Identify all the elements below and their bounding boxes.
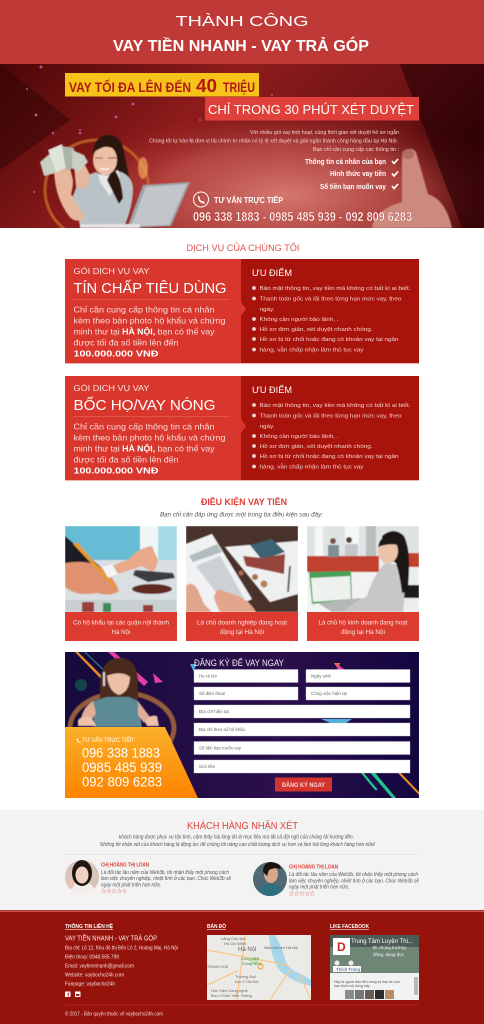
hotline label: TƯ VẤN TRỰC TIẾP — [214, 195, 284, 205]
avatar: woman — [65, 860, 99, 894]
map: Trường Đại — [235, 974, 256, 979]
caption text: Hà Nội — [112, 630, 130, 636]
testimonial: first customer: Là đối tác lâu năm của Web3b, tôi nhận thấy một phong cách — [101, 869, 229, 876]
facebook widget — [330, 935, 419, 1000]
map: Hồ Chí Minh — [224, 941, 246, 946]
conditions subtitle: Bạn chỉ cần đáp ứng được một trong ba điều kiện sau đây: — [160, 512, 323, 518]
ring glow — [45, 140, 149, 240]
hero banner — [0, 64, 484, 228]
testimonials intro — [100, 834, 376, 848]
testimonial: first customer: ☆☆☆☆☆ — [101, 887, 127, 895]
card benefits: ngày. — [260, 307, 275, 313]
facebook widget: Thích Trang — [336, 967, 361, 972]
card benefits: Hồ sơ đơn giản, xét duyệt nhanh chóng. — [260, 444, 373, 450]
offer badge: 40 million: TRIỆU — [223, 78, 255, 95]
map: Bưu Chính Viễn Thông — [211, 993, 252, 998]
hotline numbers: 0985 485 939 — [82, 760, 162, 775]
caption text: động tại Hà Nội — [341, 630, 385, 636]
hero checklist — [305, 159, 398, 191]
photo: signing paperwork — [65, 526, 177, 612]
banknotes — [40, 150, 60, 176]
testimonial: second customer: CHỊ HOÀNG THỊ LOAN — [289, 863, 338, 870]
form fields — [194, 670, 410, 773]
hero checklist: Thông tin cá nhân của bạn — [305, 159, 386, 166]
footer column: contact: VAY TIỀN NHANH - VAY TRẢ GÓP — [65, 932, 157, 942]
panel: registration form — [65, 652, 419, 798]
card benefits: Không cần người bảo lãnh, . — [260, 317, 339, 323]
hotline numbers: 096 338 1883 — [82, 746, 160, 760]
hotline label: TƯ VẤN TRỰC TIẾP: — [82, 737, 135, 744]
card left text: GÓI DỊCH VỤ VAY — [74, 266, 150, 276]
card left text: được tối đa số tiền lên đến — [74, 454, 179, 464]
offer badge: 30 minutes — [205, 97, 419, 120]
testimonial: first customer: ngày một phát triển hơn nữa. — [101, 882, 161, 888]
caption bar — [307, 612, 419, 641]
testimonial: first customer: CHỊ HOÀNG THỊ LOAN — [101, 862, 149, 868]
card benefits — [252, 267, 411, 354]
footer column: contact: Email: vaytiennhanh@gmail.com — [65, 964, 134, 970]
card left text — [73, 383, 230, 476]
footer column: contact: Website: vaybocho24h.com — [65, 972, 124, 978]
caption text: Là chủ doanh nghiệp đang hoạt — [197, 620, 287, 626]
phone glyph — [76, 738, 81, 743]
hero intro text — [149, 129, 399, 153]
avatar: man — [253, 862, 287, 896]
header headline: VAY TIỀN NHANH - VAY TRẢ GÓP — [113, 37, 369, 55]
caption text: động tại Hà Nội — [220, 630, 264, 636]
card benefits: ngày. — [260, 424, 275, 430]
woman with cash — [40, 135, 133, 225]
pointing hand — [372, 149, 452, 228]
card left text: 100.000.000 VNĐ — [74, 348, 159, 358]
card left text: kèm theo bản photo hộ khẩu và chứng — [74, 316, 226, 326]
ring glow — [67, 692, 177, 743]
form title: ĐĂNG KÝ ĐỂ VAY NGAY — [194, 657, 284, 668]
facebook widget: D — [337, 940, 346, 954]
card left text — [73, 266, 230, 358]
card benefits: Bảo mật thông tin, vay tiền mà không có bất kì ai biết. — [260, 286, 411, 292]
form fields: Địa chỉ hiện tại — [199, 708, 229, 714]
map: học Y Hà Nội — [235, 979, 259, 984]
card benefits: Hồ sơ bị từ chối hoặc đang có khoản vay tại ngân — [260, 454, 398, 460]
card left text: được tối đa số tiền lên đến — [74, 338, 179, 348]
card left text: minh thư tại HÀ NỘI, bạn có thể vay — [74, 442, 215, 454]
submit button: ĐĂNG KÝ NGAY — [282, 782, 325, 789]
map: Thống Nhất — [241, 961, 263, 966]
service card: unsecured loan — [65, 259, 419, 364]
arms and hands — [54, 166, 85, 221]
facebook widget: bạn thích nội dung này — [334, 984, 370, 988]
map: Lăng Chủ tịch — [221, 936, 246, 941]
submit button — [275, 778, 332, 792]
hero checklist: Số tiền bạn muốn vay — [320, 182, 386, 191]
testimonial: second customer: ngày một phát triển hơn nữa. — [289, 884, 349, 890]
card left text: Chỉ cần cung cấp thông tin cá nhân — [74, 422, 215, 432]
offer badge: 40 million: 40 — [196, 75, 217, 96]
form fields: Giới tiền — [199, 764, 215, 769]
card benefits: ƯU ĐIỂM — [252, 384, 292, 396]
card benefits: Thanh toán gốc và lãi theo từng hạn mức vay, theo — [260, 414, 402, 420]
orange hotline panel — [65, 727, 198, 798]
caption bar — [186, 612, 298, 641]
card benefits: Bảo mật thông tin, vay tiền mà không có bất kì ai biết. — [260, 403, 411, 409]
map: Nhà hát lớn Hà Nội — [264, 945, 298, 950]
shirt — [72, 169, 133, 225]
hotline numbers: 092 809 6283 — [82, 774, 162, 790]
hero checklist: Hình thức vay tiền — [330, 169, 386, 178]
map: Hà Nội — [238, 947, 256, 953]
footer column: contact: Fanpage: vaybocho24h — [65, 982, 115, 988]
caption text: Có hộ khẩu tại các quận nội thành — [73, 620, 169, 626]
caption text: Là chủ hộ kinh doanh đang hoạt — [318, 620, 408, 626]
card left text: kèm theo bản photo hộ khẩu và chứng — [74, 432, 226, 442]
panel: testimonials — [0, 810, 484, 910]
card left text: minh thư tại HÀ NỘI, bạn có thể vay — [74, 326, 215, 336]
hotline numbers — [82, 748, 162, 786]
facebook widget: Hãy là người đầu tiên trong số bạn bè của — [334, 980, 400, 984]
caption text — [73, 620, 169, 636]
facebook widget: Đi chúng trường — [373, 945, 406, 950]
form fields: Họ và tên — [199, 674, 217, 678]
footer column: contact: Địa chỉ: Lô 12, Khu đô thị Bến Lô 2, Hoàng Mai, Hà Nội — [65, 944, 178, 952]
social icons — [65, 992, 80, 997]
copyright: © 2017 - Bản quyền thuộc về vaybocho24h.com — [65, 1010, 163, 1018]
footer column: contact: Điện thoại: 0948.565.799 — [65, 954, 119, 960]
testimonial: second customer: làm việc chuyên nghiệp, nhiệt tình ở các bạn. Chúc Web3b sẽ — [289, 877, 419, 884]
card left text: TÍN CHẤP TIÊU DÙNG — [74, 280, 226, 297]
laptop — [80, 182, 190, 228]
card left text: GÓI DỊCH VỤ VAY — [74, 383, 150, 393]
caption text — [197, 620, 287, 636]
hair behind — [92, 134, 130, 178]
offer badge: 30 minutes: CHỈ TRONG 30 PHÚT XÉT DUYỆT — [208, 102, 414, 117]
card benefits: hàng, vẫn chấp nhận làm thủ tục vay — [260, 464, 364, 470]
photo: businesswoman with laptop — [307, 526, 419, 612]
testimonials intro: khách hàng được phục vụ tận tình, cảm thấy hài lòng đó là mục tiêu mà tất cả đội ngũ của chúng tôi hướng đến. — [119, 834, 354, 840]
form fields: Số điện thoại — [199, 691, 225, 696]
form fields: Ngày sinh — [311, 674, 331, 678]
condition card: business owner — [186, 526, 298, 641]
hero intro text: Chúng tôi tự hào là đơn vị tài chính tư nhân có tỷ lệ xét duyệt và giải ngân thành công hàng đầu tại Hà Nội. — [149, 138, 398, 144]
testimonial: first customer — [65, 860, 231, 895]
card benefits: Không cần người bảo lãnh, . — [260, 434, 339, 440]
caption bar — [65, 612, 177, 641]
testimonial: first customer: làm việc chuyên nghiệp, nhiệt tình ở các bạn. Chúc Web3b sẽ — [101, 875, 231, 882]
map: TRUNG HOÀ — [207, 965, 229, 969]
sparkles — [26, 66, 273, 193]
card left text: BỐC HỌ/VAY NÓNG — [74, 396, 215, 414]
offer badge: 40 million — [65, 73, 259, 96]
testimonial: second customer: Là đối tác lâu năm của Web3b, tôi nhận thấy một phong cách — [289, 871, 418, 878]
card benefits: Hồ sơ đơn giản, xét duyệt nhanh chóng. — [260, 327, 373, 333]
condition card: household registration — [65, 526, 177, 641]
testimonial: second customer: ☆☆☆☆☆ — [289, 889, 315, 897]
facebook widget: Trung Tâm Luyện Thi... — [351, 939, 413, 945]
footer column: facebook heading: LIKE FACEBOOK — [330, 924, 369, 930]
hero intro text: Với nhiều gói vay linh hoạt, cùng thời gian xét duyệt hồ sơ ngắn — [250, 129, 399, 136]
call centre agent — [78, 658, 159, 727]
testimonials intro: Những lời nhận xét của khách hàng là động lực để chúng tôi nâng cao chất lượng dịch vụ hơn và làm hài lòng khách hàng hơn nữa! — [100, 841, 376, 848]
footer column: map heading: BẢN ĐỒ — [207, 923, 227, 930]
card benefits: hàng, vẫn chấp nhận làm thủ tục vay — [260, 346, 364, 354]
card benefits: ƯU ĐIỂM — [252, 267, 292, 279]
testimonial: second customer — [253, 862, 419, 897]
service card: hot loan — [65, 376, 419, 481]
facebook widget: đông, dạng đọc — [373, 952, 405, 957]
card benefits: Thanh toán gốc và lãi theo từng hạn mức vay, theo — [260, 296, 402, 302]
testimonials title: KHÁCH HÀNG NHẬN XÉT — [187, 819, 298, 832]
header band — [0, 0, 484, 64]
map — [207, 935, 311, 1000]
map: Công viên — [241, 956, 259, 961]
map: Học Viện Công nghệ — [211, 988, 249, 993]
decorative confetti — [75, 652, 419, 798]
form fields: Công việc hiện tại — [311, 691, 347, 696]
section title: services: DỊCH VỤ CỦA CHÚNG TÔI — [186, 242, 300, 254]
card left text: 100.000.000 VNĐ — [74, 466, 159, 476]
card benefits — [252, 384, 411, 470]
offer badge: 40 million: VAY TỐI ĐA LÊN ĐẾN — [69, 78, 191, 95]
face — [93, 145, 117, 175]
card left text: Chỉ cần cung cấp thông tin cá nhân — [74, 304, 215, 314]
hero intro text: Bạn chỉ cần cung cấp các thông tin : — [313, 146, 399, 153]
hotline numbers: 096 338 1883 - 0985 485 939 - 092 809 6283 — [193, 209, 412, 224]
form fields: Địa chỉ theo sổ hộ khẩu — [199, 726, 245, 732]
condition card: household business — [307, 526, 419, 641]
form fields: Số tiền bạn muốn vay — [199, 746, 242, 750]
section title: conditions: ĐIỀU KIỆN VAY TIỀN — [201, 496, 287, 508]
footer column: contact — [65, 922, 178, 997]
phone icon — [194, 192, 208, 207]
card benefits: Hồ sơ bị từ chối hoặc đang có khoản vay tại ngân — [260, 337, 398, 343]
brand name: THÀNH CÔNG — [176, 13, 308, 30]
footer column: contact: THÔNG TIN LIÊN HỆ — [65, 922, 113, 930]
footer — [0, 910, 484, 1024]
photo: calculator and house — [186, 526, 298, 612]
hero glow — [126, 120, 480, 228]
caption text — [318, 620, 408, 636]
